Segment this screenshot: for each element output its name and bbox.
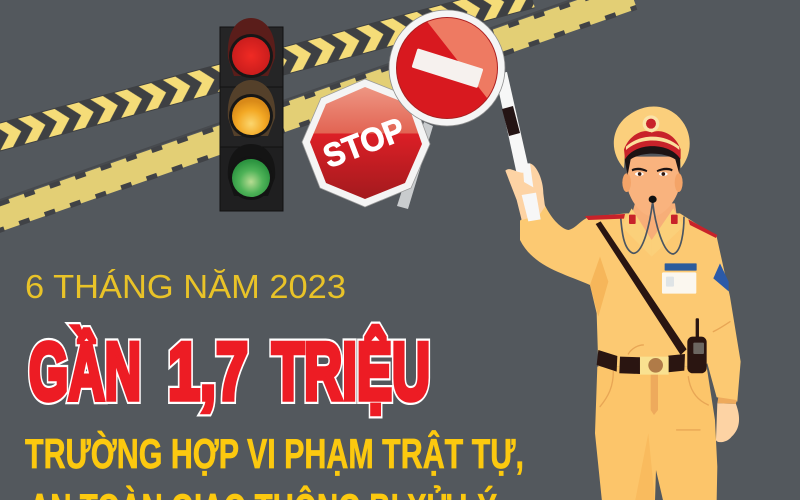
trousers [595, 367, 717, 500]
amber lamp [228, 80, 275, 138]
headline number [29, 326, 430, 417]
white bar [412, 48, 483, 88]
stop sign pole [397, 122, 433, 209]
shoulder strap [596, 221, 687, 355]
headline outline: 1,7 [168, 327, 248, 417]
face [627, 157, 680, 217]
no-entry sign [389, 10, 510, 126]
chevron road stripe [0, 0, 535, 153]
radio [687, 318, 707, 373]
jacket and arms [520, 203, 741, 402]
headline fill [29, 326, 430, 417]
whistle and cord [621, 196, 684, 254]
green lamp [228, 144, 275, 200]
raised hand [505, 163, 545, 220]
subtitle line 1: TRƯỜNG HỢP VI PHẠM TRẬT TỰ, [25, 429, 524, 477]
housing [220, 27, 283, 211]
epaulettes and collar badges [585, 214, 717, 238]
neck and collar [632, 203, 677, 240]
baton in hand [522, 163, 541, 221]
headline fill: TRIỆU [272, 326, 430, 417]
cap [614, 106, 690, 168]
stop label: STOP [318, 110, 410, 175]
headline outline [29, 326, 430, 417]
headline outline: GẦN [29, 326, 141, 417]
hair [624, 145, 681, 175]
headline fill: GẦN [29, 326, 141, 417]
lower hand [716, 403, 739, 442]
belt [597, 350, 685, 375]
sleeve patch [713, 263, 729, 291]
headline fill: 1,7 [168, 327, 248, 417]
stop sign [302, 79, 430, 207]
eyes [632, 168, 673, 176]
baton [495, 72, 540, 221]
crenellated road stripe [0, 0, 638, 237]
traffic light [220, 18, 283, 211]
jacket folds [600, 322, 730, 430]
name tag and badge [662, 263, 697, 294]
headline outline: TRIỆU [272, 326, 430, 417]
red lamp [228, 18, 275, 78]
period label: 6 THÁNG NĂM 2023 [25, 269, 346, 306]
police officer [505, 106, 741, 500]
